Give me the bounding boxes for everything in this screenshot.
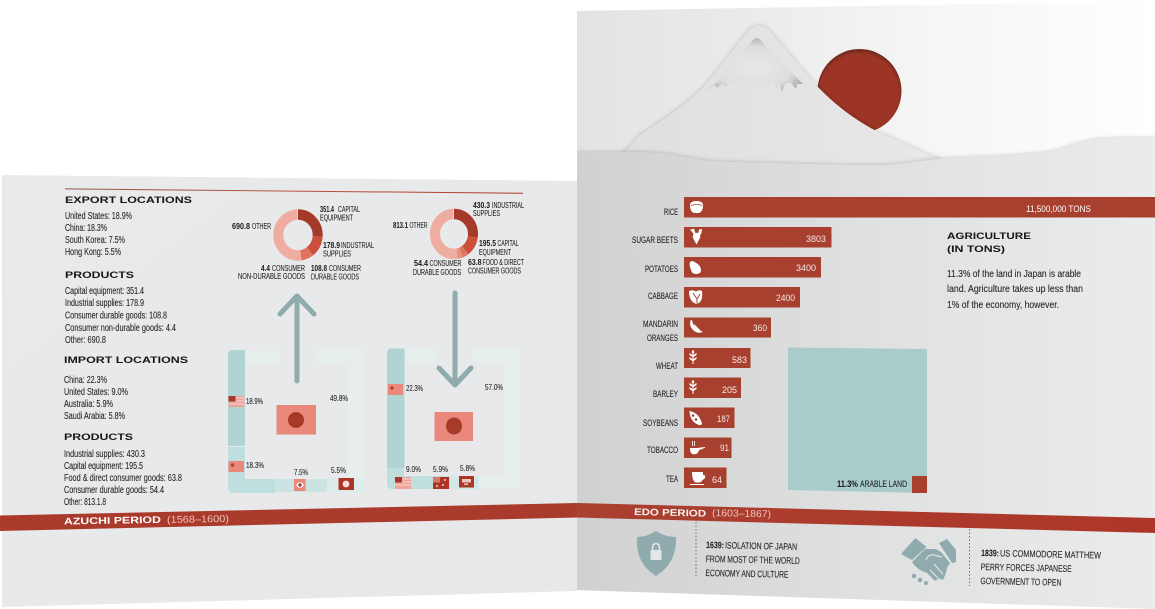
donut labels: imports: 195.5 [479, 238, 496, 248]
heading: agriculture: (IN TONS) [947, 244, 1005, 255]
donut labels: imports: DURABLE GOODS [413, 267, 461, 277]
event: 1839 Perry [980, 547, 1101, 589]
heading: import products: PRODUCTS [64, 432, 134, 443]
import list: United States: 9.0% [64, 387, 128, 398]
bar: rice: 11,500,000 TONS [1026, 204, 1091, 214]
bar: tobacco: TOBACCO [647, 444, 678, 455]
export products list: Consumer non-durable goods: 4.4 [65, 323, 176, 334]
donut labels: imports: 54.4 [414, 258, 428, 268]
bar: mandarin oranges: MANDARIN [643, 318, 678, 329]
bar: sugar beets: 3803 [806, 234, 826, 244]
bar: tea: 64 [712, 475, 722, 485]
treemap labels: 5.9% [433, 464, 448, 474]
export products list [65, 286, 176, 346]
event: 1839 Perry: PERRY FORCES JAPANESE [981, 561, 1072, 574]
bar: mandarin oranges: ORANGES [647, 332, 678, 343]
flag: Hong Kong [338, 478, 354, 490]
treemap labels [406, 382, 503, 474]
arable land highlight [912, 476, 927, 493]
bar: potatoes [645, 257, 821, 278]
flag: South Korea [294, 479, 306, 491]
export products list: Capital equipment: 351.4 [65, 286, 144, 297]
period title: AZUCHI PERIOD [64, 515, 161, 527]
flag: Japan exports [276, 405, 316, 434]
event: 1639 isolation [705, 539, 800, 580]
agriculture description: land. Agriculture takes up less than [947, 284, 1083, 295]
donut labels: exports: EQUIPMENT [320, 212, 353, 222]
bar chart: agriculture in tons [632, 197, 1155, 488]
bar: tobacco: 91 [720, 443, 729, 453]
chart: arable land square [788, 348, 927, 493]
donut chart: exports [278, 215, 318, 255]
heading: export products: PRODUCTS [65, 270, 135, 281]
treemap labels: 18.3% [246, 460, 264, 470]
period dates: (1603–1867) [712, 508, 771, 520]
arable land label: 11.3% [837, 479, 858, 489]
bar: potatoes: 3400 [796, 263, 816, 273]
export products list: Consumer durable goods: 108.8 [65, 310, 167, 322]
agriculture text block [947, 231, 1083, 311]
ground layer [570, 138, 1155, 609]
import products list: Industrial supplies: 430.3 [64, 449, 145, 460]
donut labels: exports: 108.8 [311, 263, 327, 273]
donut labels: imports [393, 200, 524, 277]
import products list: Food & direct consumer goods: 63.8 [64, 473, 182, 484]
heading: import locations: IMPORT LOCATIONS [64, 355, 189, 366]
flag: China [228, 461, 244, 472]
donut chart: imports [435, 214, 473, 254]
donut labels: imports: 430.3 [473, 200, 490, 210]
import text block [64, 355, 189, 508]
bar: tea [666, 468, 726, 488]
bar: barley: BARLEY [653, 388, 679, 399]
treemap labels: 9.0% [406, 464, 421, 474]
treemap labels [246, 393, 348, 477]
bar: rice: RICE [664, 206, 678, 217]
export list: China: 18.3% [65, 223, 107, 234]
treemap: export destinations [228, 350, 364, 493]
donut labels: exports: DURABLE GOODS [311, 272, 359, 282]
export products list: Other: 690.8 [65, 335, 106, 346]
flag: Japan imports [434, 412, 473, 441]
event: 1639 isolation: 1639: [706, 539, 724, 550]
donut labels: exports: CAPITAL [338, 204, 360, 214]
bar: potatoes: POTATOES [645, 263, 678, 274]
bar: cabbage: 2400 [776, 293, 795, 303]
donut labels: exports: CONSUMER [329, 263, 361, 273]
export products list: Industrial supplies: 178.9 [65, 298, 144, 309]
bar: cabbage: CABBAGE [648, 290, 678, 301]
heading: agriculture [947, 231, 1032, 255]
bar: barley [653, 378, 741, 399]
arrow: down imports [439, 293, 471, 385]
donut labels: imports: 813.1 [393, 220, 408, 230]
event: 1639 isolation: ISOLATION OF JAPAN [725, 539, 797, 552]
bar: soybeans: 187 [717, 414, 730, 424]
donut labels: imports: CAPITAL [498, 238, 519, 248]
heading: agriculture: AGRICULTURE [947, 231, 1032, 242]
treemap labels: 5.5% [331, 465, 346, 475]
donut labels: exports: INDUSTRIAL [341, 240, 374, 250]
event: 1839 Perry: US COMMODORE MATTHEW [1000, 547, 1101, 561]
import list: Saudi Arabia: 5.8% [64, 411, 125, 422]
icon: shield with lock [637, 531, 676, 576]
bar: soybeans: SOYBEANS [643, 417, 678, 428]
export text block [65, 195, 193, 346]
donut labels: imports: OTHER [410, 220, 428, 230]
treemap labels: 22.3% [406, 383, 423, 393]
panel: right page [570, 0, 1155, 609]
agriculture description: 1% of the economy, however. [947, 300, 1059, 311]
heading: export locations: EXPORT LOCATIONS [65, 195, 193, 206]
donut labels: imports: INDUSTRIAL [492, 200, 524, 210]
donut labels: exports: 690.8 [232, 221, 250, 231]
export list: United States: 18.9% [65, 211, 132, 222]
treemap: import sources [387, 348, 519, 489]
period title: EDO PERIOD [634, 507, 706, 520]
treemap labels: 5.8% [460, 463, 475, 473]
bar: cabbage [648, 287, 800, 308]
treemap labels: 7.5% [294, 467, 308, 477]
donut labels: imports: SUPPLIES [473, 208, 500, 218]
import products list [64, 449, 182, 508]
event: 1639 isolation: FROM MOST OF THE WORLD [706, 553, 800, 566]
export list: South Korea: 7.5% [65, 235, 125, 246]
bar: barley: 205 [722, 385, 737, 395]
mountain [622, 26, 941, 175]
bar: wheat: WHEAT [656, 360, 678, 371]
donut labels: imports: EQUIPMENT [479, 247, 511, 257]
import list: China: 22.3% [64, 375, 107, 386]
flag: China import [388, 384, 403, 395]
donut labels: imports: CONSUMER GOODS [468, 266, 521, 276]
bar: mandarin oranges [643, 318, 771, 343]
import products list: Capital equipment: 195.5 [64, 461, 143, 472]
divider: isolation [695, 522, 697, 577]
event: 1839 Perry: 1839: [981, 547, 999, 558]
flag: United States [228, 396, 244, 407]
import list [64, 375, 128, 422]
flag: United States import [395, 477, 411, 489]
donut labels: imports: CONSUMER [430, 258, 462, 268]
donut labels: exports [232, 204, 374, 282]
donut labels: exports: SUPPLIES [323, 248, 351, 258]
donut labels: exports: OTHER [252, 221, 271, 231]
bar: tobacco [647, 438, 732, 458]
flag: Australia [433, 477, 449, 489]
donut labels: exports: 351.4 [320, 204, 334, 214]
treemap labels: 18.9% [246, 396, 263, 406]
bar: rice [664, 197, 1155, 218]
arable land label [837, 479, 907, 489]
sun [818, 49, 902, 133]
donut labels: exports: 178.9 [323, 240, 340, 250]
export list [65, 211, 132, 258]
icon: handshake [901, 538, 956, 585]
bar: sugar beets: SUGAR BEETS [632, 234, 678, 245]
agriculture description [947, 269, 1083, 311]
bar: sugar beets [632, 227, 832, 248]
event: 1839 Perry: GOVERNMENT TO OPEN [980, 575, 1062, 588]
donut labels: exports: CONSUMER [272, 263, 305, 273]
donut labels: imports: 63.8 [468, 257, 482, 267]
bar: soybeans [643, 408, 734, 428]
bar: wheat: 583 [732, 355, 747, 365]
bar: wheat [656, 348, 750, 371]
band: Azuchi period [0, 503, 577, 531]
bar: mandarin oranges: 360 [753, 323, 767, 333]
export list: Hong Kong: 5.5% [65, 247, 121, 258]
import products list: Consumer durable goods: 54.4 [64, 485, 164, 496]
divider: perry [968, 529, 970, 586]
heading rule [65, 188, 523, 194]
bar: tea: TEA [666, 473, 678, 484]
panel: left page [2, 175, 577, 607]
period dates: (1568–1600) [167, 514, 229, 526]
import list: Australia: 5.9% [64, 399, 113, 410]
donut labels: exports: 4.4 [261, 263, 270, 273]
donut labels: exports: NON-DURABLE GOODS [238, 271, 305, 281]
band: Edo period [577, 503, 1155, 533]
import products list: Other: 813.1.8 [64, 497, 106, 508]
treemap labels: 57.0% [485, 382, 503, 392]
arrow: up exports [280, 296, 314, 381]
flag: Saudi Arabia [459, 476, 474, 488]
donut labels: imports: FOOD & DIRECT [482, 257, 524, 267]
event: 1639 isolation: ECONOMY AND CULTURE [705, 567, 789, 580]
agriculture description: 11.3% of the land in Japan is arable [947, 269, 1081, 280]
arable land label: ARABLE LAND [860, 479, 907, 489]
treemap labels: 49.8% [330, 393, 348, 403]
